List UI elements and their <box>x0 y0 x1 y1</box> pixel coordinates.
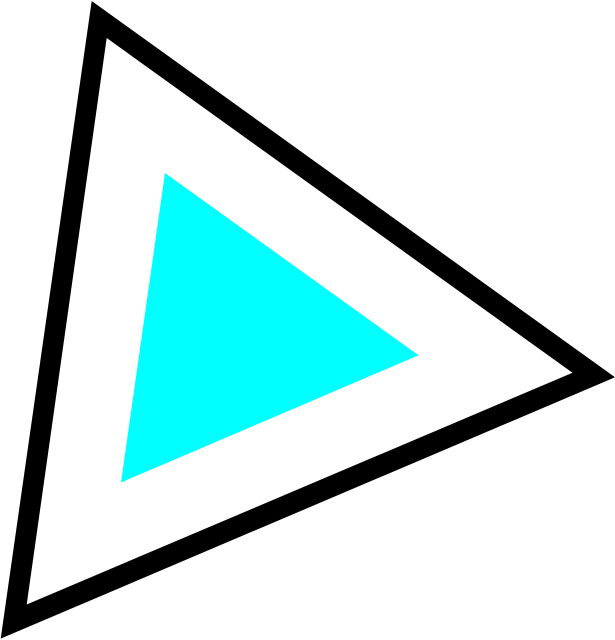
inner cyan triangle <box>121 173 418 482</box>
